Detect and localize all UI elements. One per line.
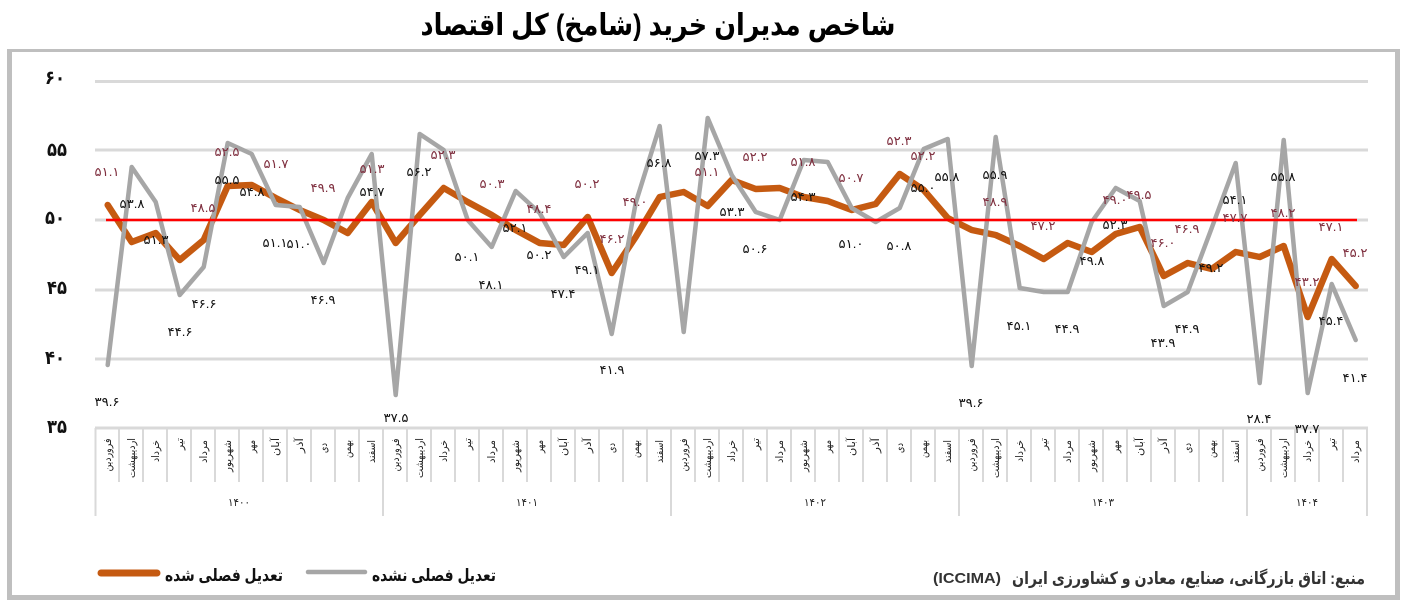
data labels: non seasonally adjusted: ۵۰.۲ xyxy=(526,248,552,262)
data labels: seasonally adjusted: ۵۲.۳ xyxy=(886,134,912,148)
data labels: seasonally adjusted: ۴۸.۵ xyxy=(190,201,216,215)
x axis: month labels: تیر xyxy=(462,438,474,451)
data labels: non seasonally adjusted: ۵۰.۶ xyxy=(742,242,768,256)
data labels: non seasonally adjusted: ۴۵.۴ xyxy=(1318,314,1344,328)
x axis: month labels: تیر xyxy=(174,438,186,451)
data labels: non seasonally adjusted: ۵۱.۳ xyxy=(144,233,169,247)
data labels: non seasonally adjusted: ۴۴.۹ xyxy=(1174,322,1200,336)
data labels: seasonally adjusted: ۴۷.۷ xyxy=(1222,211,1248,225)
x axis: month labels: مرداد xyxy=(198,440,210,463)
x axis: month labels: مرداد xyxy=(1350,440,1362,463)
x axis: month labels: خرداد xyxy=(438,440,450,462)
x axis: year labels xyxy=(228,497,1318,509)
data labels: non seasonally adjusted: ۴۹.۱ xyxy=(574,263,600,277)
reference line at 50 xyxy=(106,219,1357,221)
data labels: seasonally adjusted: ۴۳.۲ xyxy=(1294,275,1320,289)
x axis: month labels: مرداد xyxy=(1062,440,1074,463)
data labels: non seasonally adjusted: ۵۶.۲ xyxy=(406,165,432,179)
data labels: non seasonally adjusted: ۵۶.۸ xyxy=(646,156,672,170)
x axis: month labels: آذر xyxy=(869,437,882,454)
x axis: month labels: آبان xyxy=(845,437,858,456)
line: non seasonally adjusted series xyxy=(108,118,1356,395)
data labels: non seasonally adjusted: ۴۶.۶ xyxy=(192,297,216,311)
x axis: month labels: شهریور xyxy=(1086,440,1098,473)
y axis labels: ۵۵ xyxy=(47,140,67,161)
data labels: seasonally adjusted: ۵۱.۱ xyxy=(94,165,120,179)
x axis: month labels: مهر xyxy=(822,440,834,454)
x axis: month labels: بهمن xyxy=(1206,440,1218,458)
x axis: month labels: شهریور xyxy=(510,440,522,473)
x axis: month labels: اردیبهشت xyxy=(702,438,714,478)
x axis: month labels: شهریور xyxy=(222,440,234,473)
data labels: seasonally adjusted: ۵۱.۳ xyxy=(360,162,385,176)
data labels: non seasonally adjusted: ۴۵.۱ xyxy=(1006,319,1032,333)
data labels: non seasonally adjusted: ۵۰.۸ xyxy=(886,239,912,253)
data labels: non seasonally adjusted: ۵۲.۱ xyxy=(502,221,528,235)
data labels: seasonally adjusted: ۵۱.۱ xyxy=(694,165,720,179)
data labels: non seasonally adjusted: ۵۵.۸ xyxy=(934,170,960,184)
data labels: seasonally adjusted: ۵۲.۲ xyxy=(742,150,768,164)
x axis: month labels: تیر xyxy=(750,438,762,451)
x axis: month labels: مهر xyxy=(246,440,258,454)
data labels: non seasonally adjusted: ۴۴.۹ xyxy=(1054,322,1080,336)
x axis: month labels: فروردین xyxy=(966,438,978,472)
data labels: non seasonally adjusted: ۵۴.۱ xyxy=(1222,193,1248,207)
x axis: month labels: دی xyxy=(606,443,618,453)
data labels: seasonally adjusted: ۴۸.۹ xyxy=(982,195,1008,209)
line: seasonally adjusted series xyxy=(108,174,1356,317)
x axis: month labels: آبان xyxy=(557,437,570,456)
data labels: non seasonally adjusted: ۳۷.۷ xyxy=(1294,422,1320,436)
data labels: seasonally adjusted: ۴۹.۹ xyxy=(310,181,336,195)
x axis: month labels: تیر xyxy=(1326,438,1338,451)
data labels: non seasonally adjusted xyxy=(94,149,1368,436)
x axis: month labels: مرداد xyxy=(486,440,498,463)
x axis: month labels: آبان xyxy=(1133,437,1146,456)
x axis: month labels: بهمن xyxy=(918,440,930,458)
x axis: month labels: اردیبهشت xyxy=(126,438,138,478)
data labels: seasonally adjusted: ۴۵.۲ xyxy=(1342,246,1368,260)
y axis labels: ۶۰ xyxy=(45,68,65,89)
data labels: non seasonally adjusted: ۳۹.۶ xyxy=(94,395,120,409)
data labels: seasonally adjusted: ۵۰.۷ xyxy=(838,171,864,185)
source note: (ICCIMA) xyxy=(933,570,1001,587)
x axis: month labels: اسفند xyxy=(942,440,954,463)
x axis: month labels: فروردین xyxy=(102,438,114,472)
data labels: seasonally adjusted: ۴۸.۲ xyxy=(1270,206,1296,220)
x axis: year labels: ۱۴۰۲ xyxy=(804,497,826,509)
data labels: seasonally adjusted: ۵۲.۲ xyxy=(910,149,936,163)
data labels: seasonally adjusted: ۴۹.۵ xyxy=(1126,188,1152,202)
data labels: seasonally adjusted: ۴۹.۰ xyxy=(622,195,648,209)
x axis: month labels: شهریور xyxy=(798,440,810,473)
x axis: year labels: ۱۴۰۳ xyxy=(1092,497,1114,509)
data labels: seasonally adjusted: ۵۱.۷ xyxy=(264,157,289,171)
y axis labels: ۳۵ xyxy=(47,417,67,438)
data labels: non seasonally adjusted: ۴۱.۹ xyxy=(600,363,625,377)
data labels: non seasonally adjusted: ۴۶.۹ xyxy=(310,293,336,307)
data labels: non seasonally adjusted: ۵۲.۳ xyxy=(1102,218,1128,232)
x axis: month labels: آذر xyxy=(581,437,594,454)
data labels: seasonally adjusted: ۴۶.۰ xyxy=(1150,236,1176,250)
data labels: non seasonally adjusted: ۵۵.۹ xyxy=(982,168,1008,182)
x axis: month labels: مهر xyxy=(534,440,546,454)
legend: non seasonally adjusted: تعدیل فصلی نشده xyxy=(372,566,496,585)
legend: seasonally adjusted: تعدیل فصلی شده xyxy=(165,566,283,585)
x axis: month labels: خرداد xyxy=(1014,440,1026,462)
data labels: non seasonally adjusted: ۵۳.۸ xyxy=(120,197,145,211)
data labels: non seasonally adjusted: ۴۱.۴ xyxy=(1342,371,1368,385)
data labels: seasonally adjusted: ۴۹.۰ xyxy=(1102,193,1128,207)
data labels: non seasonally adjusted: ۴۸.۱ xyxy=(478,278,504,292)
y axis labels: ۴۰ xyxy=(45,348,65,369)
data labels: seasonally adjusted: ۴۷.۲ xyxy=(1030,219,1056,233)
data labels: non seasonally adjusted: ۵۳.۳ xyxy=(720,205,745,219)
x axis: month labels: دی xyxy=(894,443,906,453)
data labels: seasonally adjusted: ۴۸.۴ xyxy=(526,202,552,216)
x axis: month labels: تیر xyxy=(1038,438,1050,451)
x axis: month labels: بهمن xyxy=(342,440,354,458)
data labels: non seasonally adjusted: ۵۵.۰ xyxy=(910,181,936,195)
source note xyxy=(933,568,1365,589)
x axis: month labels: فروردین xyxy=(1254,438,1266,472)
x axis: month labels: مرداد xyxy=(774,440,786,463)
data labels: non seasonally adjusted: ۵۷.۳ xyxy=(694,149,720,163)
data labels: seasonally adjusted: ۵۲.۵ xyxy=(214,145,240,159)
data labels: seasonally adjusted: ۵۰.۳ xyxy=(480,177,505,191)
data labels: non seasonally adjusted: ۵۴.۸ xyxy=(240,185,265,199)
y axis labels xyxy=(45,68,67,438)
data labels: seasonally adjusted: ۴۶.۹ xyxy=(1174,222,1200,236)
x axis: month labels: فروردین xyxy=(390,438,402,472)
data labels: non seasonally adjusted: ۵۰.۱ xyxy=(454,250,480,264)
data labels: seasonally adjusted: ۵۱.۸ xyxy=(790,155,816,169)
x axis: month labels: دی xyxy=(318,443,330,453)
data labels: non seasonally adjusted: ۴۹.۲ xyxy=(1198,261,1224,275)
data labels: seasonally adjusted: ۵۰.۲ xyxy=(574,177,600,191)
data labels: non seasonally adjusted: ۴۳.۹ xyxy=(1150,336,1176,350)
data labels: seasonally adjusted: ۴۷.۱ xyxy=(1318,220,1344,234)
x axis: month labels: دی xyxy=(1182,443,1194,453)
data labels: non seasonally adjusted: ۵۴.۷ xyxy=(360,185,385,199)
x axis: month labels: فروردین xyxy=(678,438,690,472)
data labels: non seasonally adjusted: ۵۴.۳ xyxy=(790,190,816,204)
data labels: non seasonally adjusted: ۳۹.۶ xyxy=(958,396,984,410)
x axis: month labels: اردیبهشت xyxy=(1278,438,1290,478)
data labels: non seasonally adjusted: ۵۱.۰ xyxy=(838,237,864,251)
data labels: non seasonally adjusted: ۵۵.۵ xyxy=(214,173,240,187)
title: شاخص مدیران خرید (شامخ) کل اقتصاد xyxy=(420,9,896,42)
x axis: month labels: خرداد xyxy=(726,440,738,462)
x axis: month labels: بهمن xyxy=(630,440,642,458)
data labels: non seasonally adjusted: ۵۱.۱ xyxy=(262,236,288,250)
x axis: year labels: ۱۴۰۱ xyxy=(516,497,538,509)
x axis: month labels: اردیبهشت xyxy=(990,438,1002,478)
data labels: non seasonally adjusted: ۵۵.۸ xyxy=(1270,170,1296,184)
x axis: month labels: مهر xyxy=(1110,440,1122,454)
data labels: non seasonally adjusted: ۳۷.۵ xyxy=(384,411,409,425)
data labels: non seasonally adjusted: ۴۷.۴ xyxy=(550,287,576,301)
x axis: month labels: آذر xyxy=(1157,437,1170,454)
x axis: month labels: خرداد xyxy=(150,440,162,462)
data labels: non seasonally adjusted: ۴۴.۶ xyxy=(168,325,192,339)
x axis: month labels xyxy=(102,437,1362,478)
x axis: year labels: ۱۴۰۴ xyxy=(1296,497,1318,509)
x axis: month labels: آبان xyxy=(269,437,282,456)
x axis: month labels: اردیبهشت xyxy=(414,438,426,478)
x axis: year labels: ۱۴۰۰ xyxy=(228,497,250,509)
x axis: month labels: آذر xyxy=(293,437,306,454)
data labels: seasonally adjusted: ۴۶.۲ xyxy=(600,232,625,246)
data labels: non seasonally adjusted: ۲۸.۴ xyxy=(1246,412,1272,426)
x axis: month labels: اسفند xyxy=(366,440,378,463)
y axis labels: ۴۵ xyxy=(47,278,67,299)
data labels: non seasonally adjusted: ۵۱.۰ xyxy=(286,237,312,251)
data labels: seasonally adjusted: ۵۲.۳ xyxy=(430,148,456,162)
y axis labels: ۵۰ xyxy=(45,208,65,229)
data labels: seasonally adjusted xyxy=(94,134,1368,289)
x axis: month labels: خرداد xyxy=(1302,440,1314,462)
x axis: month labels: اسفند xyxy=(1230,440,1242,463)
x axis: month labels: اسفند xyxy=(654,440,666,463)
data labels: non seasonally adjusted: ۴۹.۸ xyxy=(1080,254,1105,268)
